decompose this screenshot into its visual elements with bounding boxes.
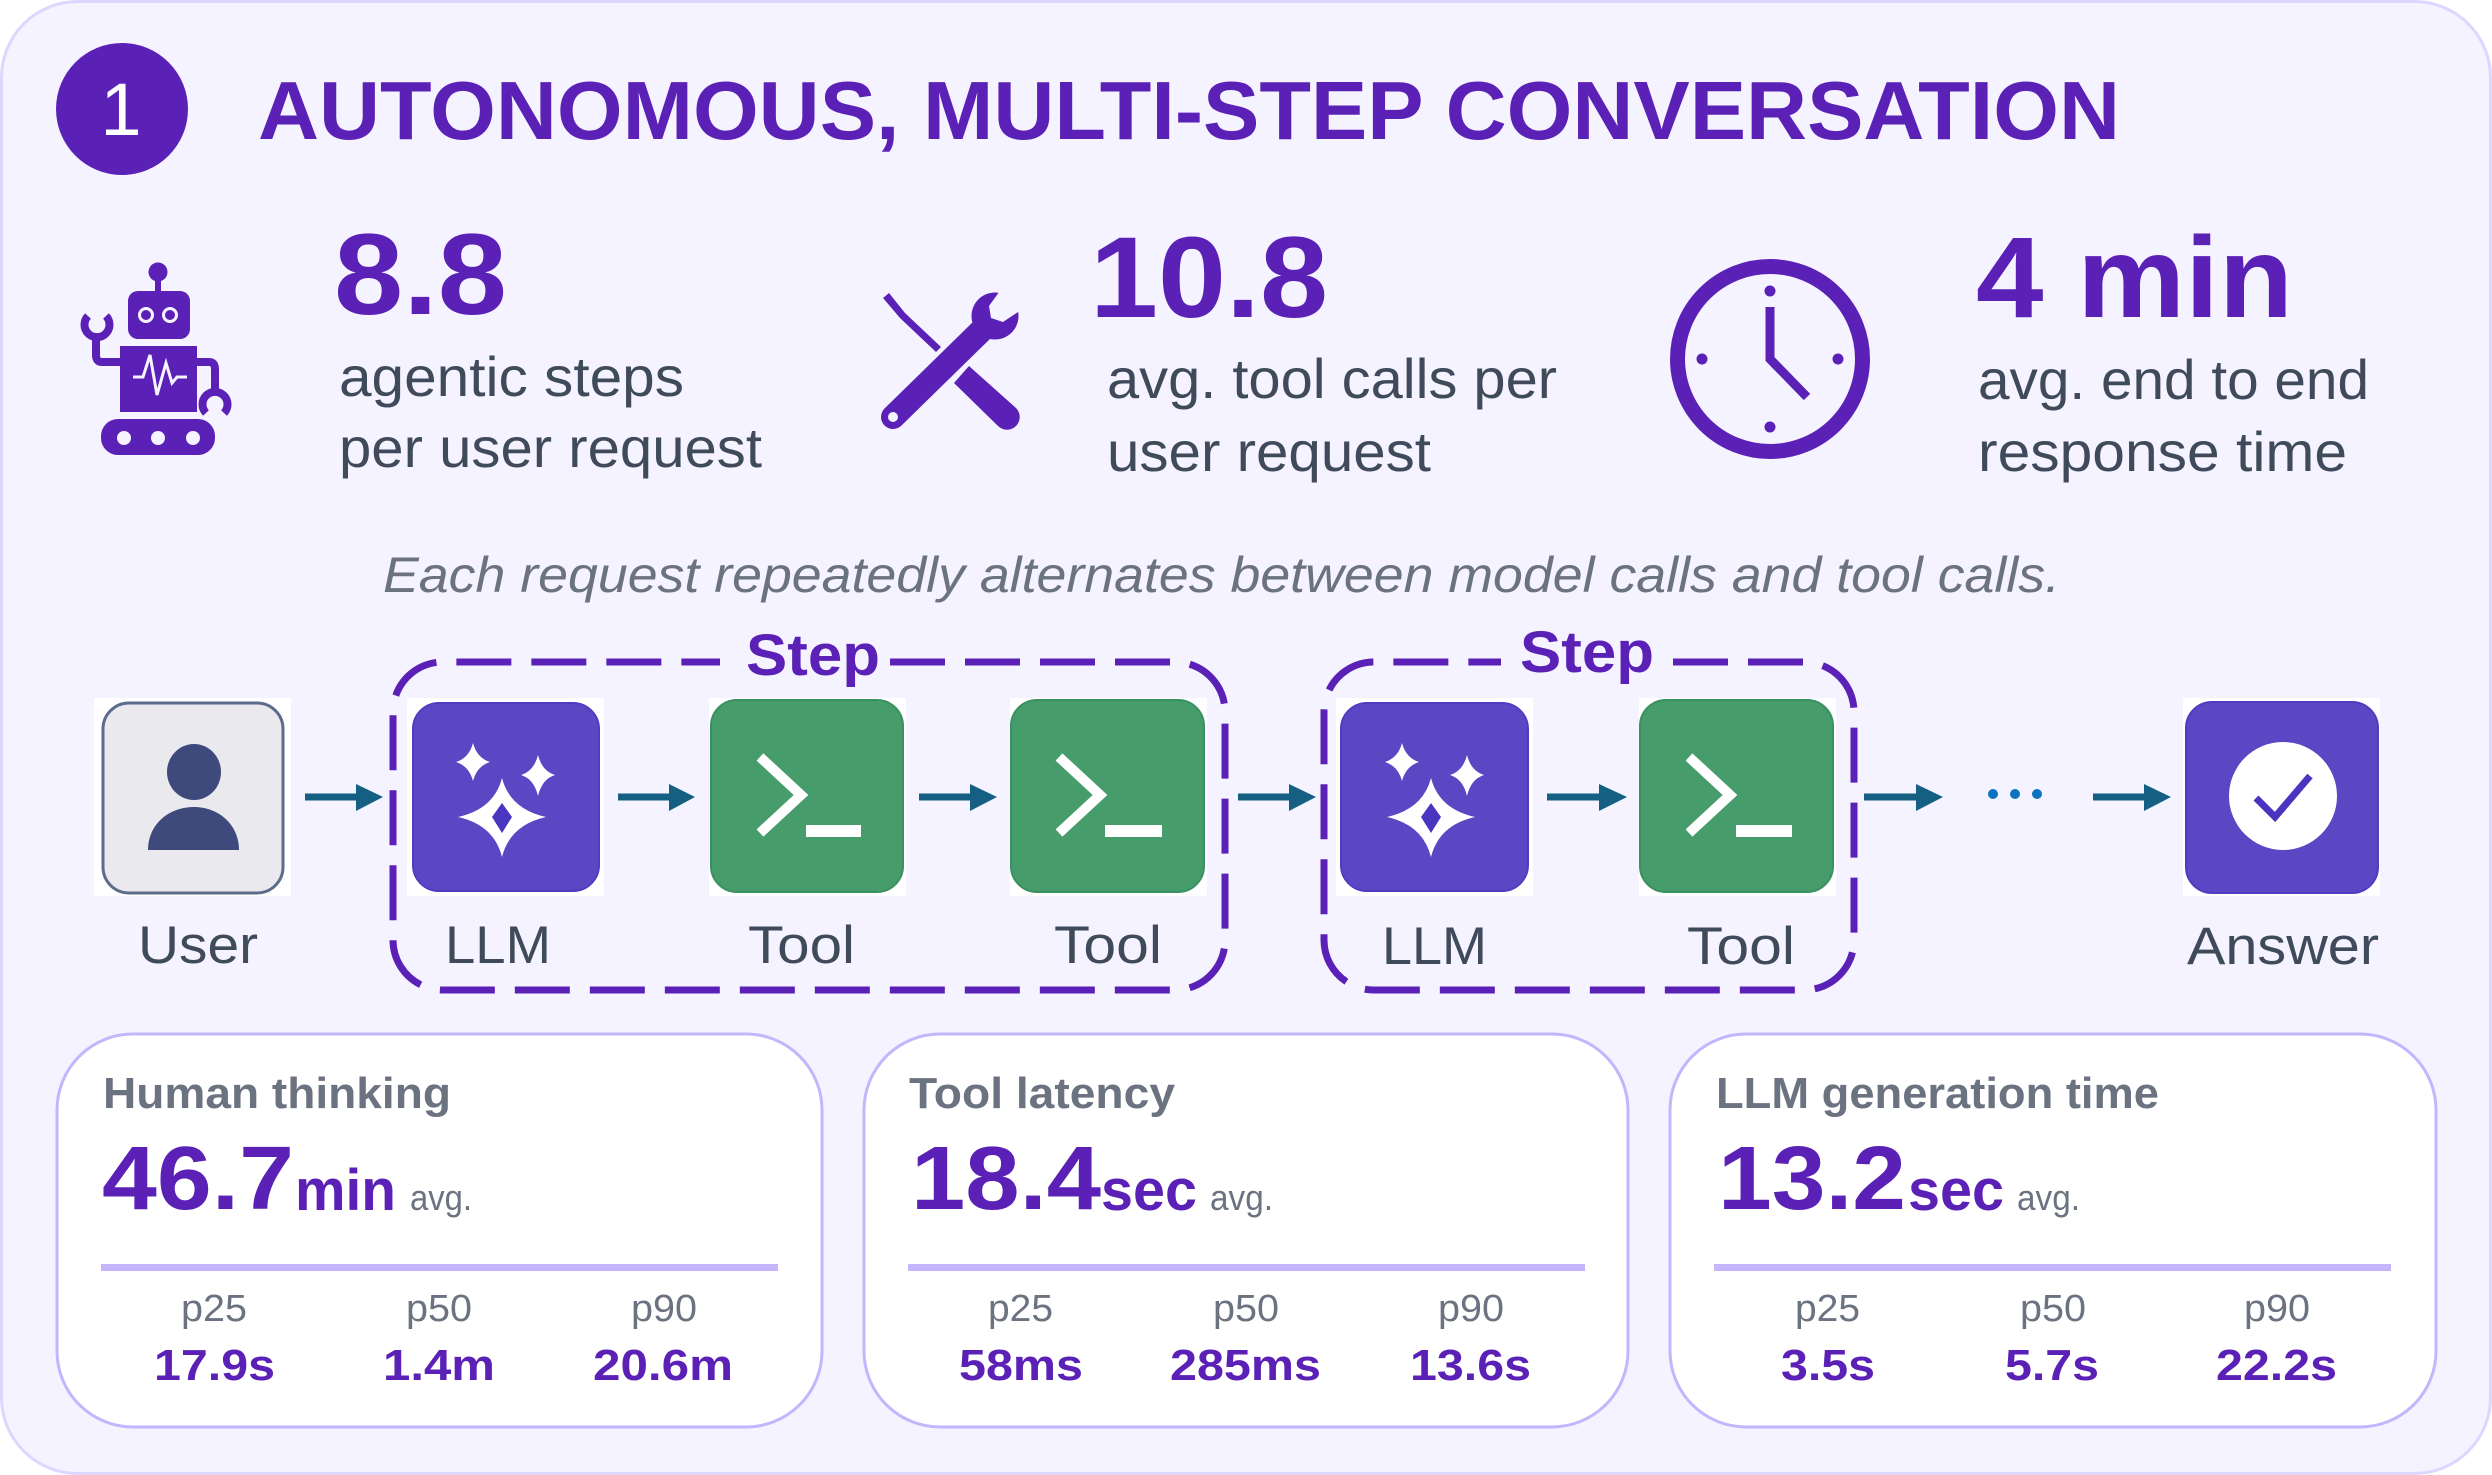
card: tool latency: sec [1101, 1158, 1197, 1223]
step group 1 [393, 623, 1225, 990]
card: tool latency: 18.4 [911, 1129, 1101, 1229]
card: tool latency: p25 [988, 1288, 1053, 1330]
stat: agentic steps: agentic steps [339, 345, 684, 408]
arrow [1238, 784, 1316, 811]
card: LLM generation time: p90 [2244, 1288, 2310, 1330]
card: human thinking: 20.6m [593, 1341, 733, 1390]
ellipsis [1988, 789, 2042, 799]
card: LLM generation time: p25 [1795, 1288, 1860, 1330]
card: tool latency: avg. [1210, 1177, 1273, 1218]
label: tool: Tool [748, 916, 855, 975]
card: LLM generation time: LLM generation time [1716, 1069, 2159, 1118]
stat: tool calls: 10.8 [1090, 214, 1328, 342]
arrow [919, 784, 997, 811]
label: user: User [138, 916, 258, 975]
icon: user [94, 698, 291, 896]
card: human thinking: 46.7 [102, 1129, 294, 1229]
step group 2: Step [1520, 620, 1654, 685]
card: LLM generation time: sec [1908, 1158, 2004, 1223]
card: human thinking: p90 [631, 1288, 697, 1330]
title: AUTONOMOUS, MULTI-STEP CONVERSATION [258, 64, 2120, 157]
card: tool latency: 285ms [1170, 1341, 1321, 1390]
flow diagram [94, 620, 2380, 990]
icon: answer [2183, 698, 2380, 896]
arrow [1864, 784, 1943, 811]
card: human thinking: p50 [406, 1288, 472, 1330]
card: tool latency: 13.6s [1410, 1341, 1531, 1390]
card: LLM generation time: 22.2s [2216, 1341, 2337, 1390]
card: human thinking: 1.4m [383, 1341, 495, 1390]
step group 2 [1324, 620, 1854, 990]
section number badge: 1 [100, 68, 142, 151]
card: human thinking: Human thinking [103, 1069, 451, 1118]
icon: wrench and screwdriver [883, 280, 1030, 430]
icon: robot [84, 262, 228, 455]
card: LLM generation time [1670, 1034, 2436, 1427]
card: tool latency: Tool latency [909, 1069, 1176, 1118]
arrow [618, 784, 695, 811]
stat: response time [1976, 214, 2369, 483]
stat: agentic steps: 8.8 [334, 211, 507, 339]
label: LLM: LLM [1382, 917, 1487, 976]
stat: tool calls [1090, 214, 1557, 483]
caption: Each request repeatedly alternates between model calls and tool calls. [383, 547, 2060, 603]
section number badge [56, 43, 188, 175]
icon: clock [1678, 266, 1862, 452]
stat: agentic steps [334, 211, 762, 479]
card: tool latency [864, 1034, 1628, 1427]
icon: LLM [407, 698, 604, 896]
stat: agentic steps: per user request [339, 416, 762, 479]
card: tool latency: p90 [1438, 1288, 1504, 1330]
icon: tool [1010, 698, 1207, 896]
card: human thinking: 17.9s [154, 1341, 275, 1390]
label: answer: Answer [2187, 917, 2379, 976]
card: LLM generation time: 5.7s [2005, 1341, 2099, 1390]
label: LLM: LLM [445, 916, 551, 975]
card: human thinking: avg. [410, 1177, 472, 1218]
card: LLM generation time: 3.5s [1781, 1341, 1875, 1390]
icon: tool [1639, 698, 1836, 896]
card: LLM generation time: 13.2 [1718, 1129, 1906, 1229]
stat: response time: response time [1978, 420, 2347, 483]
label: tool: Tool [1687, 917, 1795, 976]
icon: LLM [1336, 698, 1533, 896]
icon: tool [709, 698, 906, 896]
stat: response time: avg. end to end [1978, 348, 2369, 411]
stat: response time: 4 min [1976, 214, 2293, 342]
card: LLM generation time: avg. [2017, 1177, 2080, 1218]
card: human thinking: p25 [181, 1288, 247, 1330]
stat: tool calls: user request [1107, 420, 1431, 483]
arrow [1547, 784, 1627, 811]
label: tool: Tool [1054, 916, 1162, 975]
card: tool latency: p50 [1213, 1288, 1279, 1330]
arrow [305, 784, 383, 811]
arrow [2093, 784, 2171, 811]
card: human thinking [57, 1034, 822, 1427]
card: tool latency: 58ms [959, 1341, 1083, 1390]
card: human thinking: min [295, 1158, 396, 1223]
step group 1: Step [746, 623, 880, 688]
card: LLM generation time: p50 [2020, 1288, 2086, 1330]
stat: tool calls: avg. tool calls per [1107, 347, 1557, 410]
